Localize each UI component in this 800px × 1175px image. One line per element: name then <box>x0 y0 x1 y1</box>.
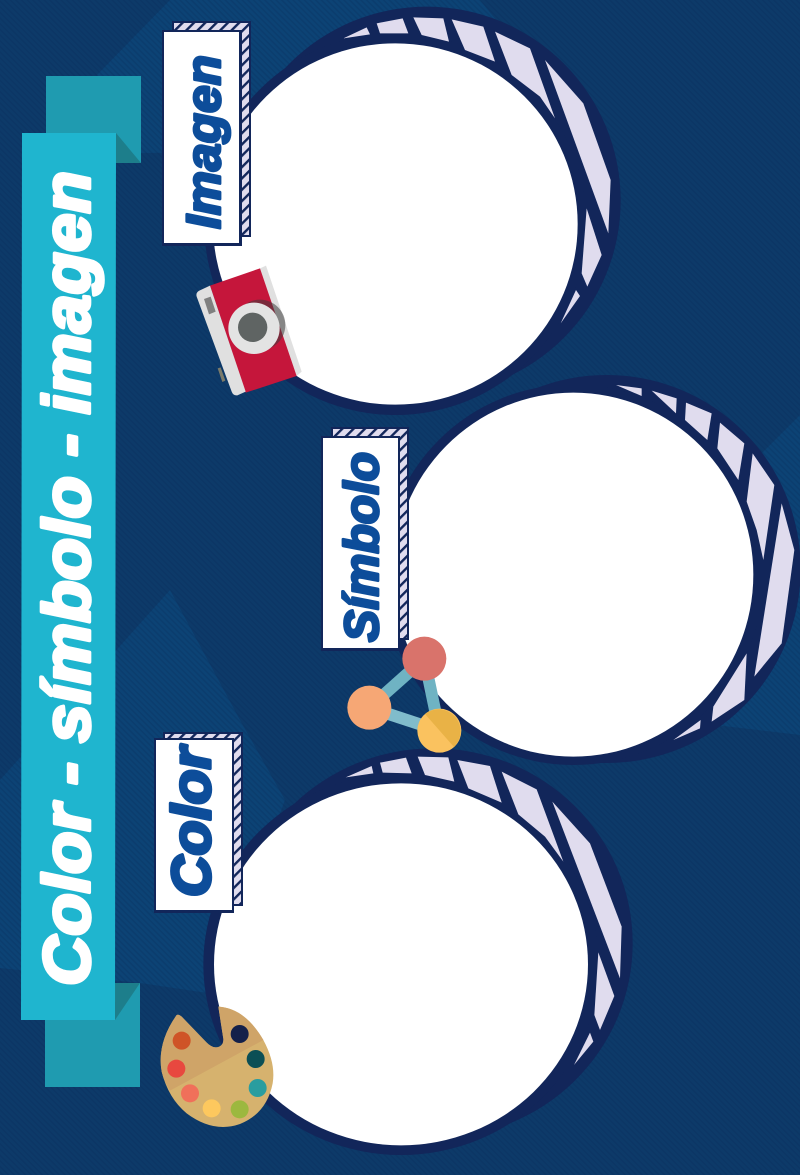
white circle <box>213 43 578 405</box>
striped crescent <box>343 17 611 323</box>
ribbon back tab: top <box>46 76 141 163</box>
label: color <box>154 732 243 913</box>
label text: Color <box>160 744 222 897</box>
back ring <box>234 748 633 1138</box>
striped crescent <box>616 385 794 740</box>
front ring <box>203 774 599 1155</box>
icon: camera <box>196 266 302 395</box>
striped crescent <box>346 757 622 1065</box>
ribbon fold: top <box>116 133 141 163</box>
title ribbon <box>21 76 141 1087</box>
icon: network symbol <box>347 637 461 753</box>
icon: paint palette <box>161 1007 273 1127</box>
panel: color circle <box>203 748 633 1155</box>
label: imagen <box>162 21 251 246</box>
label text: Imagen <box>178 55 231 229</box>
back ring <box>233 7 621 395</box>
white circle <box>393 393 753 757</box>
ribbon main band <box>21 133 116 1020</box>
back ring <box>413 375 800 763</box>
label text: Símbolo <box>336 452 389 642</box>
ribbon back tab: bottom <box>45 983 140 1087</box>
panel: simbolo circle <box>383 375 800 765</box>
ribbon fold: bottom <box>115 983 140 1020</box>
front ring <box>383 384 764 765</box>
label: simbolo <box>321 427 409 651</box>
front ring <box>204 33 586 415</box>
white circle <box>214 783 588 1145</box>
title: Color - símbolo - imagen <box>30 171 104 986</box>
panel: imagen circle <box>204 7 621 415</box>
